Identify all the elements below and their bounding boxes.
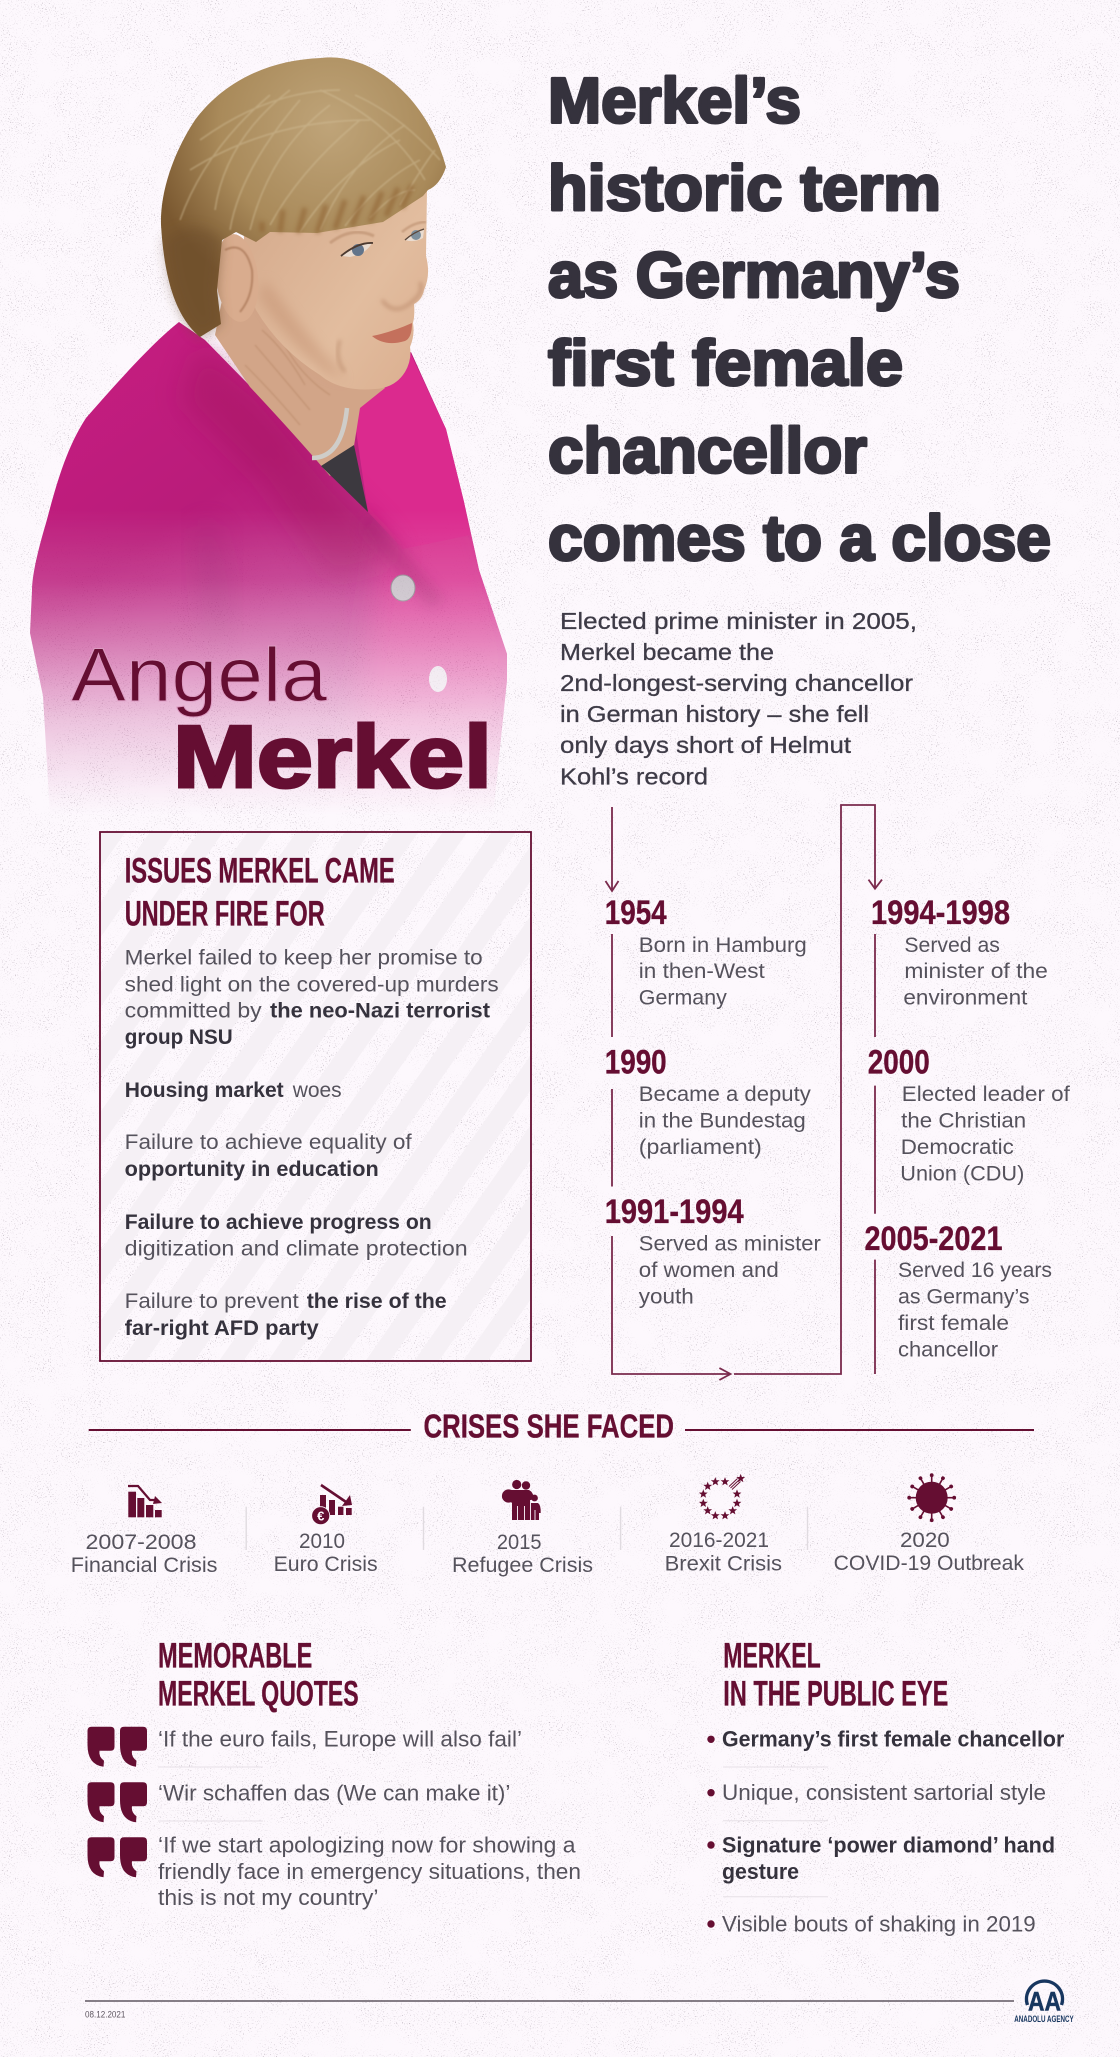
1991-1994: 1991-1994 — [605, 1193, 744, 1231]
icon: coronavirus — [907, 1473, 956, 1522]
quote 3: friendly face in emergency situations, then — [158, 1859, 581, 1884]
1991-1994: Served as minister — [639, 1232, 821, 1256]
face shading — [260, 286, 337, 376]
neck wrinkles — [245, 330, 330, 425]
jacket shading — [190, 336, 441, 606]
hair lower shadow — [165, 228, 222, 337]
crisis: 2010 euro crisis — [274, 1485, 378, 1576]
quote 3: ‘If we start apologizing now for showing a — [158, 1832, 576, 1857]
jacket right lapel — [353, 352, 470, 549]
right eye — [402, 222, 426, 241]
panel heading: UNDER FIRE FOR — [125, 894, 325, 933]
issue: education — [125, 1130, 412, 1181]
nose — [382, 282, 421, 309]
mouth line — [338, 340, 345, 372]
arrow — [719, 1368, 730, 1380]
timeline right column — [864, 894, 1070, 1362]
face — [244, 190, 428, 389]
issue: NSU murders: Merkel failed to keep her promise to — [125, 946, 483, 970]
issue: NSU murders: shed light on the covered-up murders — [125, 972, 499, 996]
arrow — [606, 881, 618, 891]
1990: (parliament) — [639, 1135, 762, 1159]
quote 2: ‘Wir schaffen das (We can make it)’ — [158, 1780, 510, 1805]
heading: MERKEL QUOTES — [158, 1675, 359, 1714]
item: shaking: Visible bouts of shaking in 2019 — [722, 1912, 1036, 1937]
2000 — [868, 1043, 1070, 1186]
2005-2021: first female — [898, 1311, 1009, 1335]
2000: 2000 — [868, 1043, 930, 1081]
jacket lower right bright area — [370, 500, 507, 726]
item: first female chancellor: Germany’s first female chancellor — [722, 1727, 1065, 1752]
icon: quote mark 1 — [88, 1727, 147, 1767]
crisis: 2010 euro crisis: Euro Crisis — [274, 1553, 378, 1576]
title — [548, 65, 1051, 574]
issue: NSU murders — [125, 946, 499, 1049]
quote 1: ‘If the euro fails, Europe will also fail’ — [158, 1727, 522, 1752]
issue: far-right AFD: the rise of the — [307, 1289, 447, 1313]
crisis: 2010 euro crisis: 2010 — [299, 1530, 345, 1553]
crisis: 2015 refugee crisis: 2015 — [497, 1531, 542, 1554]
issue: far-right AFD — [125, 1289, 447, 1340]
icon: falling bar chart — [128, 1486, 162, 1517]
name: Angela Merkel — [71, 633, 492, 806]
heading: IN THE PUBLIC EYE — [723, 1675, 948, 1714]
2005-2021: chancellor — [898, 1338, 998, 1362]
button — [391, 575, 415, 601]
2005-2021: 2005-2021 — [864, 1220, 1002, 1258]
1991-1994: youth — [639, 1284, 694, 1308]
intro text: only days short of Helmut — [560, 732, 852, 758]
crisis: 2007-2008 financial crisis: Financial Crisis — [71, 1554, 218, 1577]
title: Merkel’s — [548, 65, 801, 137]
title: historic term — [548, 152, 941, 224]
icon: euro coin with falling chart: € — [317, 1508, 324, 1524]
title: as Germany’s — [548, 239, 960, 311]
intro text: in German history – she fell — [560, 701, 869, 727]
intro text: Kohl’s record — [560, 764, 708, 790]
issue: far-right AFD: far-right AFD party — [125, 1316, 319, 1340]
timeline left column — [605, 894, 821, 1308]
arrow — [868, 880, 882, 889]
1990: Became a deputy — [639, 1082, 811, 1106]
2005-2021: Served 16 years — [898, 1258, 1052, 1282]
hair — [161, 57, 446, 337]
quote 3: this is not my country’ — [158, 1885, 378, 1910]
item: power diamond — [707, 1833, 1055, 1884]
panel heading — [125, 852, 395, 933]
left eye — [330, 232, 374, 257]
crisis: 2007-2008 financial crisis: 2007-2008 — [86, 1531, 196, 1554]
panel heading: ISSUES MERKEL CAME — [125, 852, 395, 890]
issue: education: Failure to achieve equality of — [125, 1130, 412, 1154]
intro text: 2nd-longest-serving chancellor — [560, 670, 913, 696]
1954: Germany — [639, 986, 727, 1010]
first name: Angela — [71, 633, 328, 718]
1990 — [605, 1043, 811, 1159]
title: chancellor — [548, 414, 867, 486]
crisis: 2016-2021 brexit crisis: 2016-2021 — [669, 1529, 769, 1552]
1994-1998: Served as — [904, 933, 1000, 957]
title: comes to a close — [548, 502, 1051, 574]
icon: quote mark 3 — [88, 1837, 147, 1877]
intro text: Merkel became the — [560, 639, 774, 665]
crisis: 2016-2021 brexit crisis — [665, 1474, 782, 1576]
timeline connector — [606, 805, 882, 1380]
2000: Elected leader of — [902, 1082, 1070, 1106]
1990: 1990 — [605, 1043, 667, 1081]
issue: digitization and climate: digitization and climate protection — [125, 1237, 468, 1261]
logo: Anadolu Agency — [1014, 1981, 1074, 2024]
icon: refugee family — [502, 1480, 541, 1520]
issue: NSU murders: committed by — [125, 998, 262, 1022]
panel: Merkel in the public eye — [707, 1637, 1065, 1937]
crisis: 2020 covid-19 outbreak: 2020 — [900, 1529, 950, 1552]
logo: Anadolu Agency: AA — [1028, 1987, 1061, 2017]
quote 3 — [158, 1832, 581, 1910]
panel: memorable Merkel quotes — [88, 1637, 581, 1910]
heading — [158, 1637, 359, 1714]
1994-1998: environment — [903, 986, 1027, 1010]
2005-2021 — [864, 1220, 1052, 1362]
2000: Union (CDU) — [900, 1162, 1024, 1186]
neck — [215, 300, 385, 476]
1994-1998: 1994-1998 — [871, 894, 1010, 932]
1954: in then-West — [639, 959, 765, 983]
icon: quote mark 2 — [88, 1782, 147, 1822]
crisis: 2015 refugee crisis: Refugee Crisis — [452, 1554, 593, 1577]
date: 08.12.2021 — [85, 2010, 125, 2021]
intro text: Elected prime minister in 2005, — [560, 608, 917, 634]
item: sartorial style: Unique, consistent sartorial style — [722, 1780, 1046, 1805]
dark top — [321, 445, 368, 512]
crisis: 2016-2021 brexit crisis: Brexit Crisis — [665, 1553, 782, 1576]
1994-1998: minister of the — [904, 959, 1048, 983]
issue: housing market: woes — [292, 1078, 342, 1102]
issue: NSU murders: group NSU — [125, 1025, 233, 1049]
crisis: 2020 covid-19 outbreak — [834, 1473, 1024, 1575]
icon: EU stars with departing star — [699, 1474, 745, 1519]
1990: in the Bundestag — [639, 1109, 806, 1133]
last name: Merkel — [173, 707, 492, 806]
issue: NSU murders: the neo-Nazi terrorist — [270, 998, 490, 1022]
portrait: Angela Merkel in magenta jacket — [30, 57, 520, 830]
issue: digitization and climate: Failure to achieve progress on — [125, 1210, 432, 1234]
item: power diamond: gesture — [722, 1859, 799, 1884]
1994-1998 — [871, 894, 1048, 1010]
issue: digitization and climate — [125, 1210, 468, 1261]
issue: education: opportunity in education — [125, 1157, 379, 1181]
heading: MEMORABLE — [158, 1637, 312, 1676]
section heading: crises she faced: CRISES SHE FACED — [424, 1408, 674, 1445]
crisis: 2007-2008 financial crisis — [71, 1486, 218, 1577]
panel: issues Merkel came under fire for — [100, 832, 531, 1361]
item: power diamond: Signature ‘power diamond’ hand — [722, 1833, 1055, 1858]
intro text — [560, 608, 917, 790]
1954 — [605, 894, 807, 1010]
crisis: 2015 refugee crisis — [452, 1480, 593, 1577]
ear — [217, 234, 254, 312]
issue: far-right AFD: Failure to prevent — [125, 1289, 299, 1313]
hair fringe shadow — [262, 185, 412, 233]
1991-1994 — [605, 1193, 821, 1308]
issue: housing market: Housing market — [125, 1078, 284, 1102]
heading — [723, 1637, 948, 1714]
necklace — [312, 408, 347, 458]
hair strands — [180, 90, 440, 232]
1954: Born in Hamburg — [639, 933, 807, 957]
crisis: 2020 covid-19 outbreak: COVID-19 Outbreak — [834, 1552, 1024, 1575]
2000: Democratic — [901, 1135, 1014, 1159]
jacket — [30, 322, 507, 815]
2000: the Christian — [901, 1109, 1026, 1133]
lips — [372, 323, 412, 343]
2005-2021: as Germany’s — [898, 1284, 1030, 1308]
heading: MERKEL — [723, 1637, 821, 1676]
logo: Anadolu Agency: ANADOLU AGENCY — [1014, 2014, 1074, 2024]
1954: 1954 — [605, 894, 667, 932]
title: first female — [548, 327, 903, 399]
1991-1994: of women and — [639, 1258, 779, 1282]
lower button — [429, 666, 447, 692]
